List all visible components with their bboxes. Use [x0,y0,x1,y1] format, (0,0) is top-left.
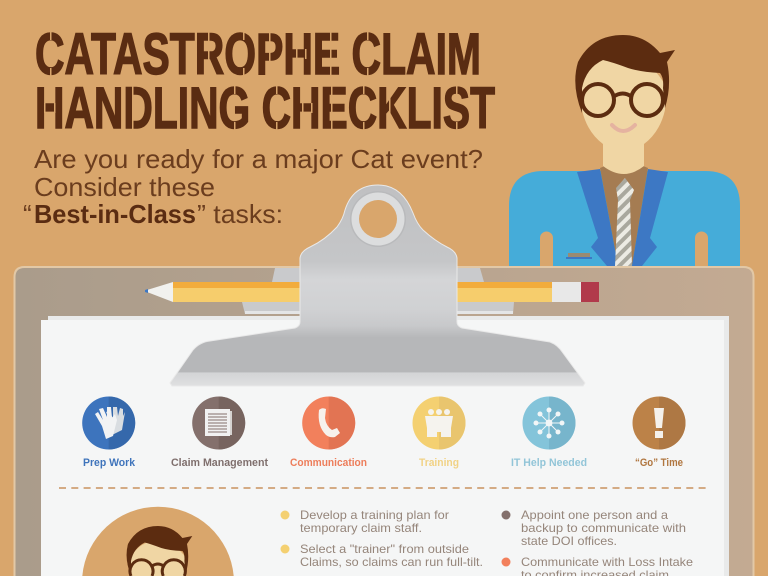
task text [300,542,483,569]
task text: Communicate with Loss Intake [521,555,693,569]
task text: Develop a training plan for [300,508,449,522]
icon: phone [302,396,355,450]
paper sheets [41,316,729,576]
category: training [412,396,466,469]
subtitle: “ [23,199,32,229]
checklist column 1 [280,508,483,569]
task text: temporary claim staff. [300,521,422,535]
subtitle: ” tasks: [197,199,283,229]
icon: network [522,396,576,450]
icon: exclamation [632,396,686,450]
task text [521,508,686,548]
icon: document [192,396,245,450]
category: go time [632,396,686,469]
subtitle: Best-in-Class [34,199,196,229]
category: training: Training [419,457,459,469]
title: HANDLING CHECKLIST [35,76,495,141]
clipboard clip [170,185,585,386]
category: claim management [171,396,268,469]
category: communication [290,396,367,469]
bullet [502,510,510,520]
task text: Select a "trainer" from outside [300,542,469,556]
title: CATASTROPHE CLAIM [35,22,481,87]
category: it help needed: IT Help Needed [511,457,587,469]
task text: Appoint one person and a [521,508,668,522]
task text: Claims, so claims can run full-tilt. [300,555,483,569]
icon: people [412,396,466,450]
task text [300,508,449,535]
bullet [502,558,510,566]
subtitle: Consider these [34,172,215,202]
task text: backup to communicate with [521,521,686,535]
task text [521,555,693,576]
pencil [145,282,599,302]
bullet [280,544,290,554]
icon: gloves [82,396,135,450]
illustration: man in round badge [82,507,234,576]
subtitle [23,144,483,229]
clipboard board [14,267,754,576]
category: prep work: Prep Work [83,457,136,469]
category: it help needed [511,396,587,469]
category: claim management: Claim Management [171,457,268,469]
subtitle: Are you ready for a major Cat event? [34,144,483,174]
illustration: man in blue jacket [509,35,740,266]
task text: state DOI offices. [521,534,617,548]
checklist column 2 [502,508,693,576]
category: prep work [82,396,136,469]
title [35,22,495,141]
category: go time: “Go” Time [635,457,683,469]
bullet [280,510,290,520]
clip back plate [242,268,514,314]
category: communication: Communication [290,457,367,469]
